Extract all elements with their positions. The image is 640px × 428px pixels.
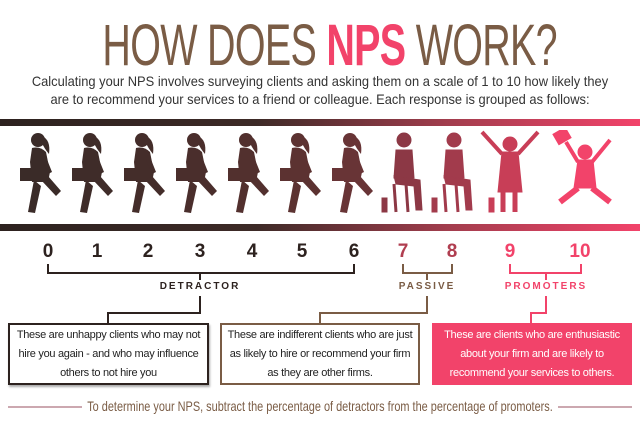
- footer note: To determine your NPS, subtract the percentage of detractors from the percentage of promoters.: [87, 398, 553, 414]
- icon: passive figures: [382, 133, 472, 212]
- scale numbers: 10: [569, 241, 591, 262]
- subtitle: Calculating your NPS involves surveying clients and asking them on a scale of 1 to 10 how likely they: [32, 73, 608, 89]
- box: passive: as likely to hire or recommend your firm: [230, 348, 410, 360]
- box: promoters: about your firm and are likely to: [460, 348, 604, 360]
- box: passive: [220, 323, 420, 385]
- title: HOW DOES NPS WORK?: [102, 13, 557, 78]
- scale numbers: 3: [195, 241, 205, 262]
- box: promoters: recommend your services to others.: [450, 366, 614, 378]
- box: detractor: These are unhappy clients who may not: [17, 328, 200, 340]
- box: promoters: [432, 323, 632, 385]
- icon: promoter figures: [482, 127, 610, 212]
- box: passive: as they are other firms.: [267, 366, 373, 378]
- scale numbers: 5: [297, 241, 307, 262]
- icon: detractor figures: [20, 133, 373, 213]
- scale numbers: 9: [505, 241, 515, 262]
- figures row: [20, 130, 612, 213]
- box: passive: These are indifferent clients who are just: [228, 328, 412, 340]
- scale numbers: 2: [143, 241, 153, 262]
- box: detractor: hire you again - and who may influence: [18, 348, 198, 360]
- label: detractor: DETRACTOR: [160, 281, 240, 292]
- box: promoters: These are clients who are enthusiastic: [444, 328, 620, 340]
- subtitle: [32, 73, 608, 107]
- box: detractor: [8, 323, 209, 385]
- box: detractor: others to not hire you: [60, 366, 157, 378]
- scale numbers: 0: [43, 241, 53, 262]
- label: passive: PASSIVE: [399, 281, 455, 292]
- scale numbers: 6: [349, 241, 359, 262]
- label: promoters: PROMOTERS: [505, 281, 587, 292]
- scale numbers: 7: [398, 241, 408, 262]
- scale numbers: 4: [247, 241, 257, 262]
- subtitle: are to recommend your services to a friend or colleague. Each response is grouped as follows:: [50, 91, 590, 107]
- scale numbers: 1: [92, 241, 102, 262]
- scale numbers: 8: [447, 241, 457, 262]
